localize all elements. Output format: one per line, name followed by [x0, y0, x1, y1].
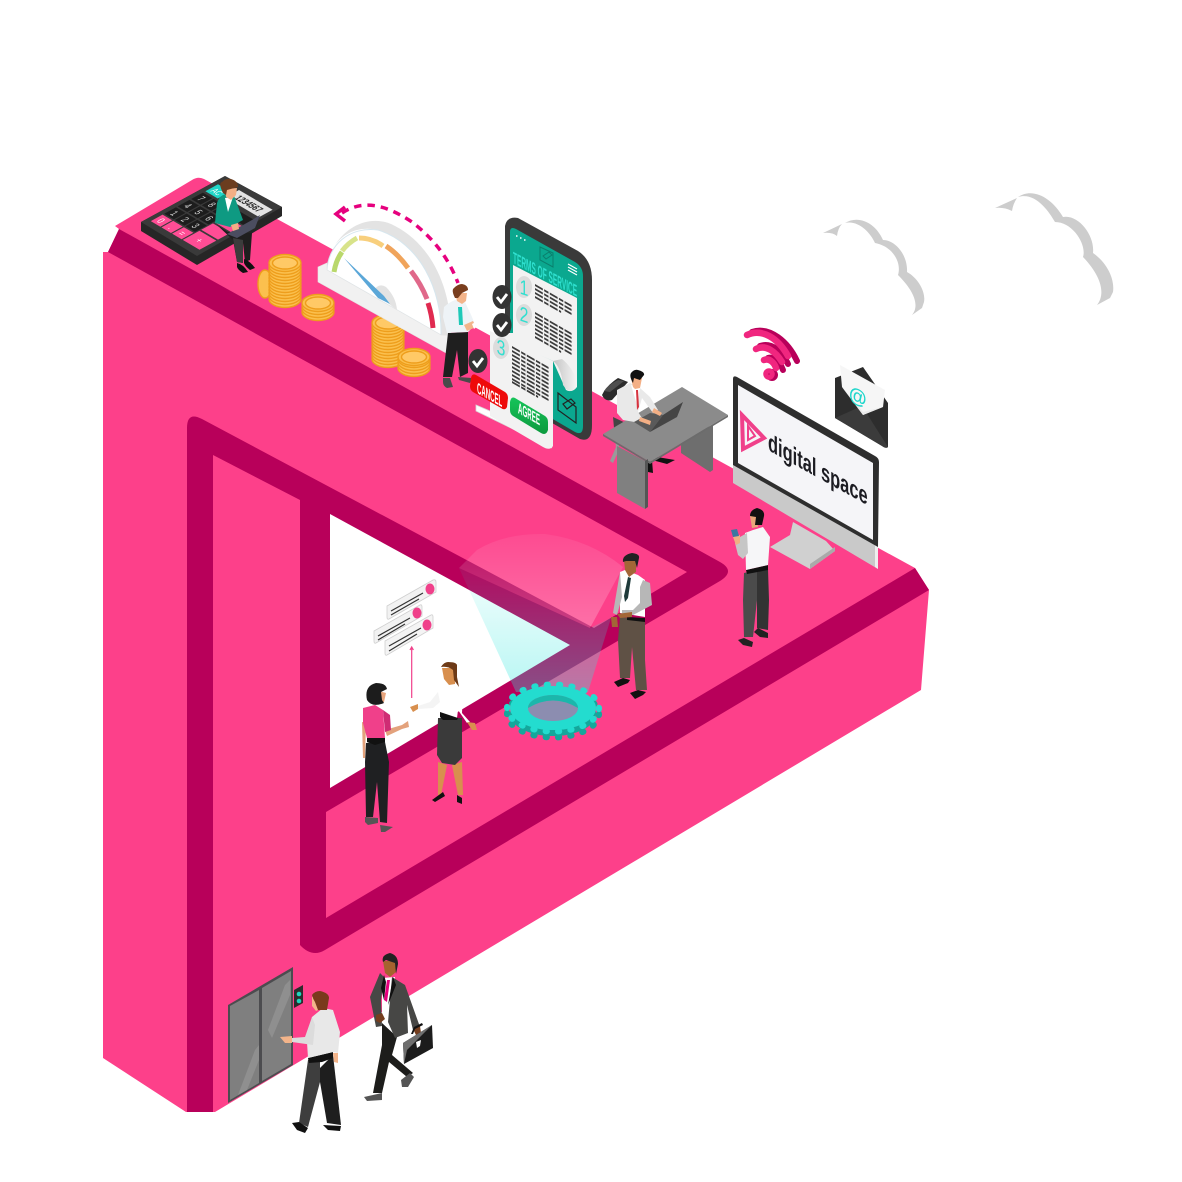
white triangle opening	[330, 514, 570, 788]
phone body	[505, 218, 592, 440]
check badges	[468, 285, 512, 373]
button: agree: AGREE	[518, 400, 540, 429]
number badges: 2	[520, 303, 528, 329]
calculator keys: 7	[194, 195, 208, 202]
dark magenta bands	[108, 229, 929, 1112]
notification cards	[374, 580, 436, 698]
briefcase	[403, 1023, 433, 1064]
calculator keys: AC	[208, 187, 225, 197]
man: white shirt at elevator	[280, 991, 341, 1133]
desk front leg	[617, 446, 645, 509]
man's legs under desk	[648, 440, 675, 473]
laptop	[634, 402, 683, 432]
calculator keys: .	[166, 224, 178, 230]
calculator keys: 2	[178, 216, 192, 223]
phone screen	[510, 228, 583, 433]
monitor stand	[770, 522, 835, 569]
woman: white blouse	[410, 662, 477, 804]
man at desk	[617, 370, 658, 423]
icon: envelope: @	[849, 382, 867, 412]
coin stack 4	[398, 348, 430, 376]
gauge face	[327, 229, 441, 335]
calculator keys: =	[175, 229, 189, 237]
gauge hub	[373, 285, 397, 310]
phone with terms of service	[468, 218, 592, 449]
coin standing behind stack	[258, 270, 272, 298]
monitor frame	[733, 376, 879, 547]
elevator call panel	[294, 985, 303, 1008]
calculator keys	[151, 181, 273, 250]
cloud: right	[995, 193, 1113, 305]
paper bottom strip	[476, 405, 552, 448]
monitor	[733, 376, 879, 569]
desk right leg	[681, 425, 713, 472]
button: agree	[510, 398, 548, 434]
calculator keys: +	[192, 237, 206, 244]
icon: envelope	[835, 365, 888, 448]
logo wordmark: digital space	[768, 428, 868, 511]
card: top	[387, 580, 436, 619]
icon: wifi signal	[747, 331, 797, 378]
logo triangle	[742, 415, 764, 449]
man: business suit with briefcase	[364, 953, 433, 1101]
number badges: 1	[520, 276, 528, 302]
elevator glass panels	[230, 990, 259, 1100]
man: reading paper by gauge	[443, 284, 483, 388]
monitor screen	[738, 385, 873, 540]
gauge meter	[318, 205, 458, 353]
coin stack 2	[302, 294, 334, 320]
card: middle	[374, 605, 422, 643]
gold coins	[258, 254, 430, 376]
cloud: left	[823, 220, 924, 315]
calculator keys: 8	[205, 201, 219, 209]
terms text lines	[512, 285, 572, 403]
calculator keys: 6	[202, 215, 216, 222]
gauge base	[318, 263, 456, 353]
phone bottom icon	[558, 393, 576, 423]
phone top icon	[540, 247, 553, 267]
calculator keys: 1	[167, 209, 181, 217]
calculator keys: 9	[216, 207, 229, 215]
button: cancel	[470, 374, 508, 411]
dashed arrow	[336, 205, 458, 283]
arrow: up to cards	[410, 647, 413, 698]
icon: teal gear	[507, 684, 599, 738]
projection beam	[459, 534, 623, 692]
monitor chin	[733, 463, 878, 569]
woman: teal jacket	[215, 179, 260, 273]
phone with terms of service: TERMS OF SERVICE	[513, 248, 577, 301]
woman: pink top	[362, 683, 409, 832]
card: front	[385, 615, 433, 655]
gauge needle	[344, 258, 390, 304]
structure silhouette	[103, 178, 929, 1112]
gauge back arc	[335, 221, 451, 342]
calculator with sitting woman	[141, 176, 282, 273]
terms sheet	[490, 265, 577, 391]
man: looking at phone	[731, 508, 770, 647]
office chair	[602, 378, 630, 463]
number badges: 3	[497, 336, 505, 362]
panel: impossible triangle structure	[103, 178, 929, 1112]
calculator body	[141, 176, 282, 265]
calculator keys: 3	[189, 222, 202, 230]
desk top	[603, 387, 728, 462]
man: grey sleeves, brown trousers	[611, 553, 652, 699]
calculator keys: 4	[181, 202, 195, 210]
paper curl	[553, 359, 577, 391]
number badges	[493, 276, 532, 362]
coin stack 1	[269, 254, 301, 308]
desk with working man	[602, 370, 728, 509]
door reflections	[238, 980, 290, 1095]
button: cancel: CANCEL	[477, 380, 502, 411]
calculator keys: 0	[154, 217, 168, 224]
calculator keys: 1234567	[232, 194, 266, 214]
calculator keys: 5	[192, 208, 205, 216]
elevator	[228, 967, 303, 1103]
elevator door frame	[228, 967, 293, 1103]
gauge coloured segments	[334, 238, 433, 328]
lower paper	[490, 331, 553, 449]
coin stack 3	[372, 314, 404, 368]
